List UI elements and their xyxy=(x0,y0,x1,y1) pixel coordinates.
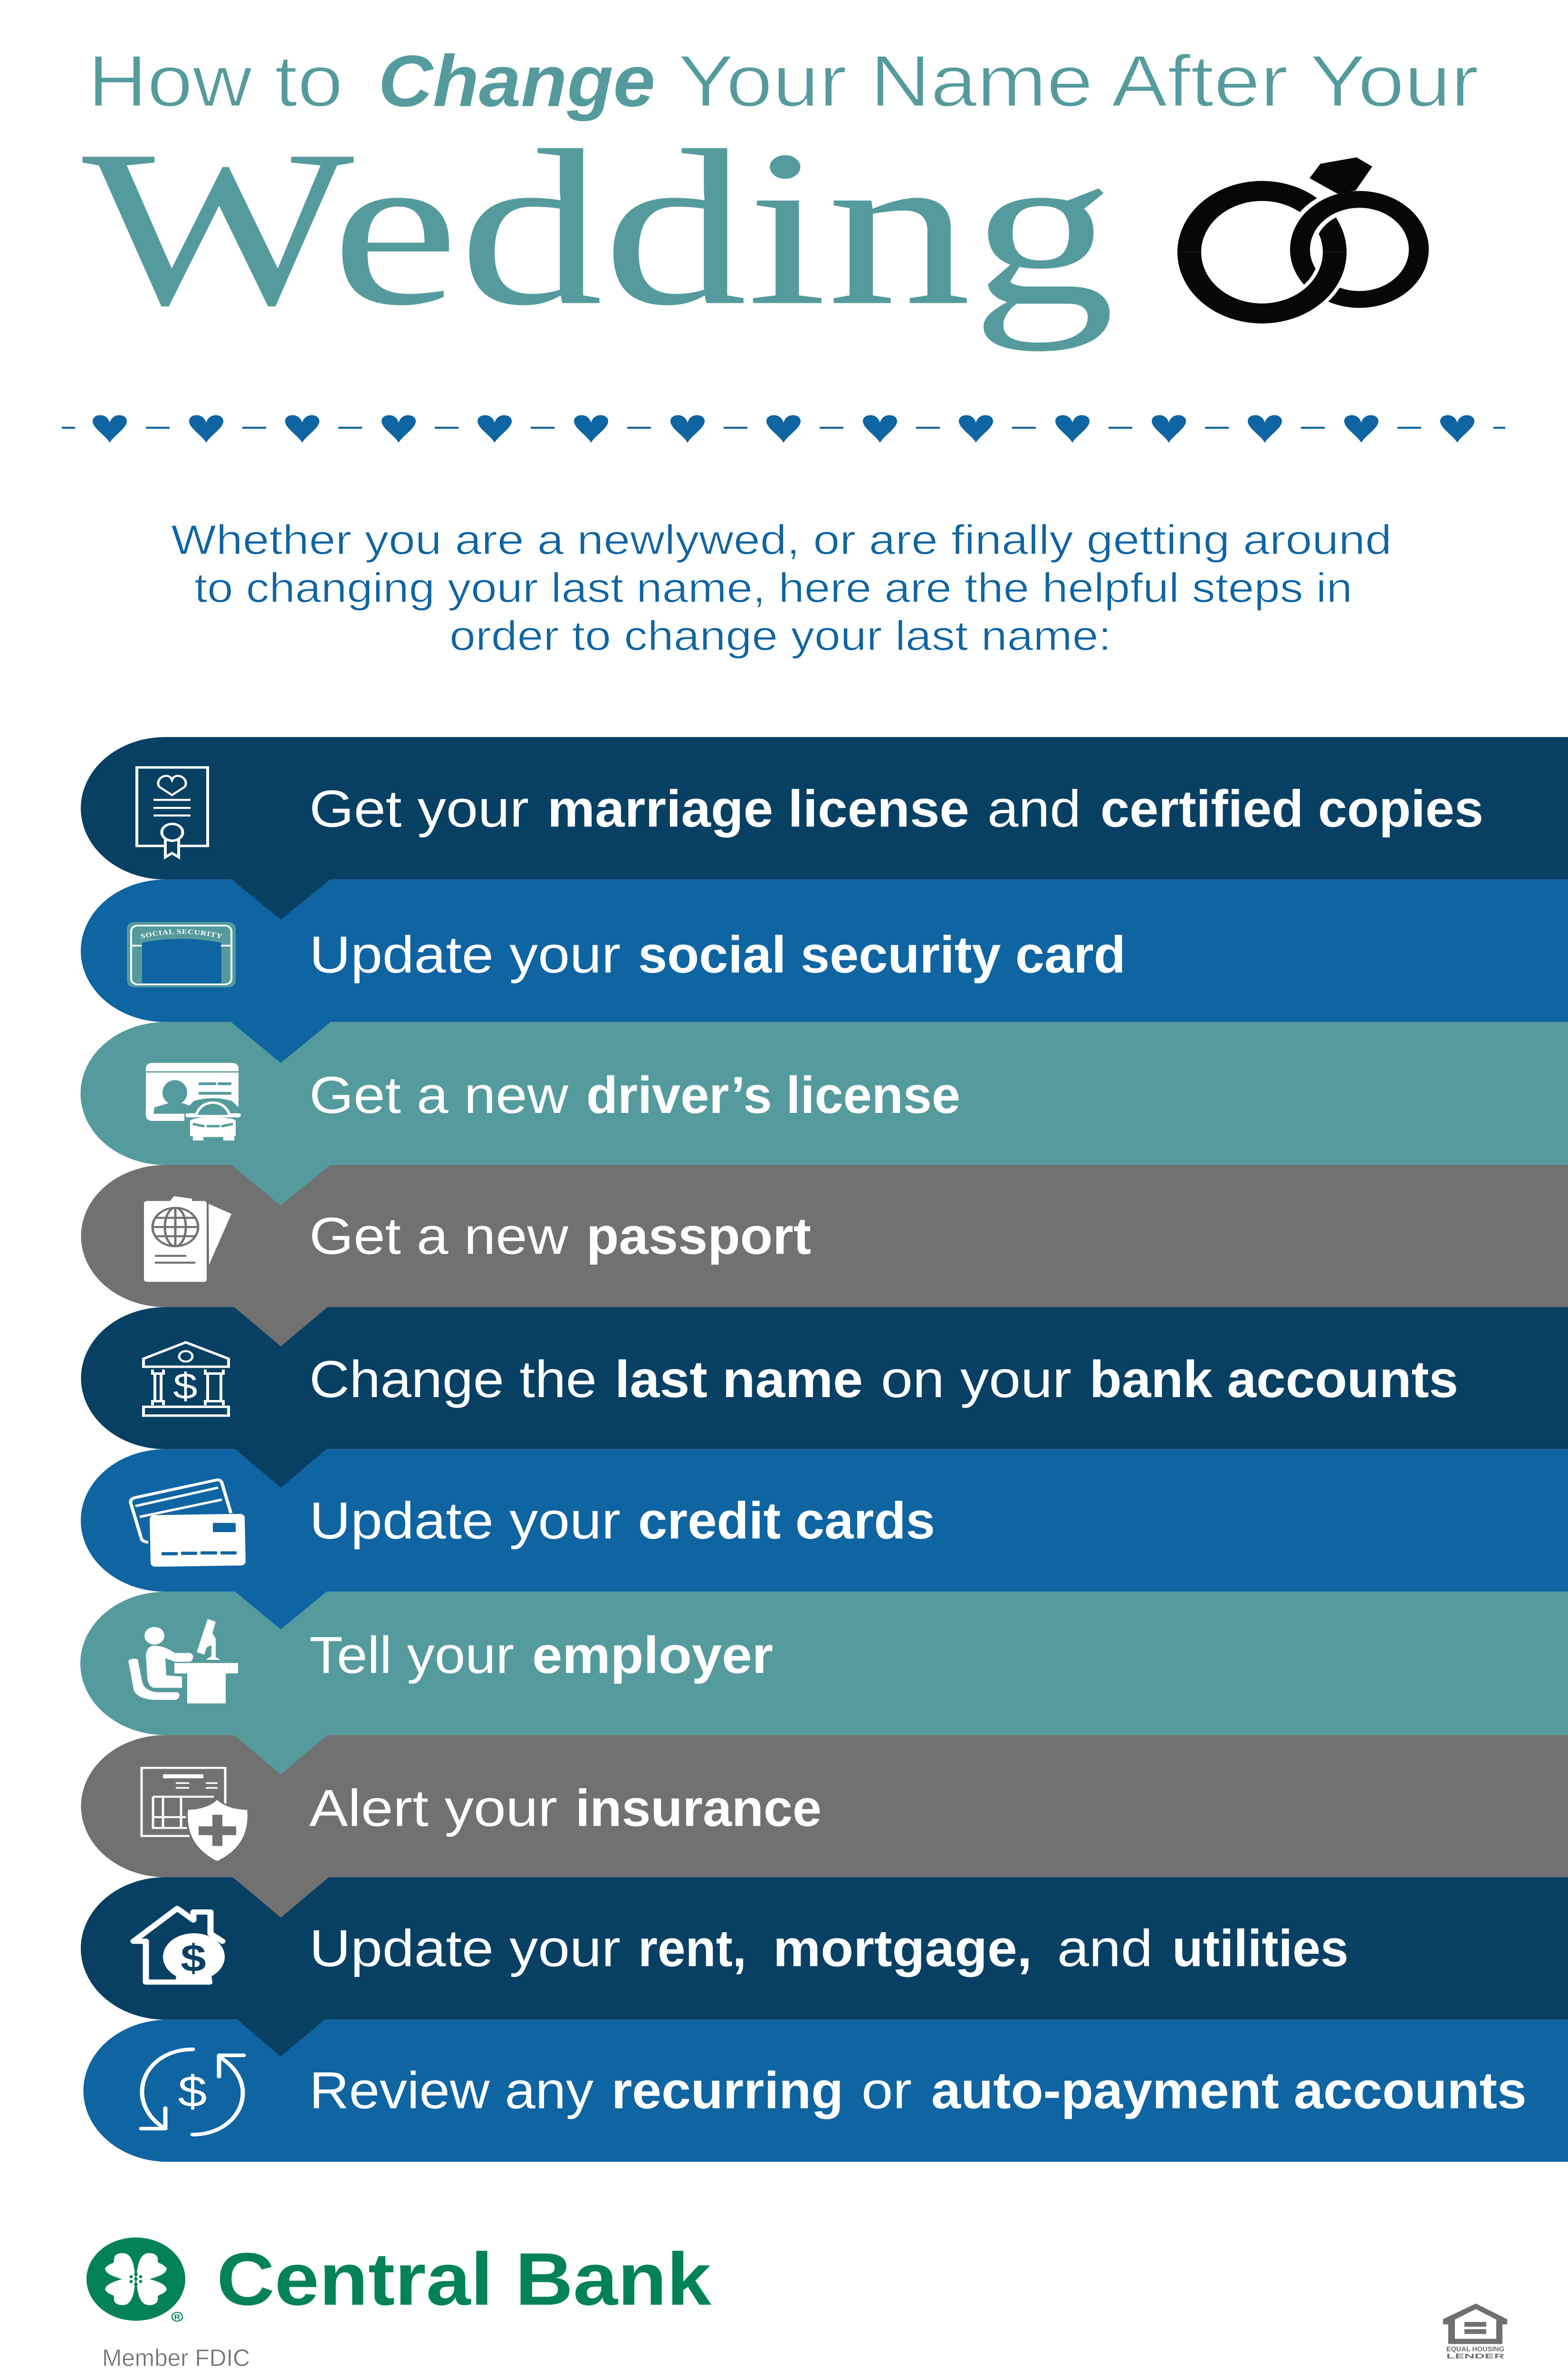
text: step 5 xyxy=(309,1350,1458,1408)
icon: social security card xyxy=(127,922,236,987)
text: step 7: employer xyxy=(532,1626,773,1684)
text: step 8: insurance xyxy=(575,1779,822,1837)
text: step 1: certified copies xyxy=(1100,779,1483,838)
panel: step 7 employer xyxy=(80,1592,1568,1775)
icon: social security card: SOCIAL SECURITY xyxy=(140,928,224,940)
icon: driver's license and car xyxy=(146,1063,242,1145)
text: step 9 xyxy=(309,1919,1348,1977)
panel: step 3 driver's license xyxy=(81,1022,1568,1206)
icon: dogwood flower seal: R xyxy=(174,2313,181,2321)
logo: equal housing lender: EQUAL HOUSING xyxy=(1446,2345,1504,2353)
panel: step 9 rent, mortgage and utilities xyxy=(81,1877,1568,2057)
text: step 1: marriage license xyxy=(547,779,969,838)
divider: row of hearts xyxy=(62,415,1505,443)
wordmark: Central Bank xyxy=(217,2238,711,2321)
text: step 1: and xyxy=(987,779,1081,838)
title: How to Change Your Name After Your: Change xyxy=(378,40,655,122)
text: step 9: utilities xyxy=(1172,1919,1348,1977)
text: step 4: Get a new xyxy=(309,1207,569,1265)
text: step 2: social security card xyxy=(638,925,1126,984)
text: step 9: rent, xyxy=(638,1919,746,1977)
panel: step 6 credit cards xyxy=(81,1449,1568,1630)
text: step 6 xyxy=(309,1491,935,1550)
text: step 5: Change the xyxy=(309,1350,597,1408)
panel: step 10 recurring and auto-payment accounts xyxy=(83,2020,1568,2162)
text: step 5: bank accounts xyxy=(1090,1350,1458,1408)
panel: step 1 marriage license xyxy=(81,737,1568,920)
logo: Central Bank xyxy=(86,2238,711,2321)
text: step 9: mortgage, xyxy=(773,1919,1032,1977)
text: step 4 xyxy=(309,1207,811,1265)
text: step 10: recurring xyxy=(612,2061,843,2119)
panel: step 4 passport xyxy=(81,1165,1568,1347)
panel: step 5 bank accounts xyxy=(81,1307,1568,1488)
text: step 7 xyxy=(309,1626,773,1684)
text: step 5: on your xyxy=(881,1350,1071,1408)
text: step 9: Update your xyxy=(309,1919,621,1977)
title: How to Change Your Name After Your: Your Name After Your xyxy=(678,40,1479,122)
text: step 8 xyxy=(309,1779,822,1837)
text: step 1: Get your xyxy=(309,779,529,838)
intro text: Whether you are a newlywed, or are finally getting around xyxy=(171,517,1392,563)
icon: person at desk xyxy=(128,1619,238,1704)
logo: equal housing lender: LENDER xyxy=(1446,2352,1504,2360)
text: step 10: or xyxy=(861,2061,912,2119)
text: step 6: credit cards xyxy=(638,1491,935,1550)
text: step 3: Get a new xyxy=(309,1066,569,1124)
icon: bank building xyxy=(143,1342,229,1416)
intro text: to changing your last name, here are the helpful steps in xyxy=(194,565,1352,611)
text: Member FDIC: Member FDIC xyxy=(102,2344,250,2371)
text: step 9: and xyxy=(1057,1919,1153,1977)
icon: insurance document and shield xyxy=(142,1768,249,1862)
icon: house with coin xyxy=(134,1908,225,1984)
text: step 5: last name xyxy=(615,1350,863,1408)
text: step 10: Review any xyxy=(309,2061,593,2119)
intro text: order to change your last name: xyxy=(449,613,1111,660)
icon: recurring payment arrows xyxy=(141,2050,244,2135)
icon: passport xyxy=(144,1196,231,1282)
title: How to Change Your Name After Your: How to xyxy=(88,40,343,122)
logo: equal housing lender xyxy=(1443,2304,1507,2360)
panel: step 2 social security card xyxy=(81,880,1568,1063)
panel: step 8 insurance xyxy=(81,1735,1568,1918)
text: step 4: passport xyxy=(586,1207,811,1265)
text: step 1 xyxy=(309,779,1483,838)
icon: dogwood flower seal xyxy=(86,2238,185,2321)
icon: recurring payment arrows: $ xyxy=(178,2067,207,2116)
icon: certificate xyxy=(137,767,208,858)
text: step 2: Update your xyxy=(309,925,621,984)
icon: interlocked wedding rings xyxy=(1189,157,1419,314)
intro text xyxy=(171,517,1392,660)
text: step 8: Alert your xyxy=(309,1779,557,1837)
icon: bank building: $ xyxy=(173,1366,198,1407)
text: step 6: Update your xyxy=(309,1491,621,1550)
text: step 7: Tell your xyxy=(309,1626,514,1684)
title: How to Change Your Name After Your xyxy=(88,40,1479,122)
icon: credit cards xyxy=(131,1480,246,1567)
title: Wedding: Wedding xyxy=(82,104,1115,352)
text: step 2 xyxy=(309,925,1126,984)
text: step 3: driver’s license xyxy=(586,1066,960,1124)
icon: house with coin: $ xyxy=(181,1937,206,1980)
text: step 3 xyxy=(309,1066,960,1124)
text: step 10 xyxy=(309,2061,1527,2119)
